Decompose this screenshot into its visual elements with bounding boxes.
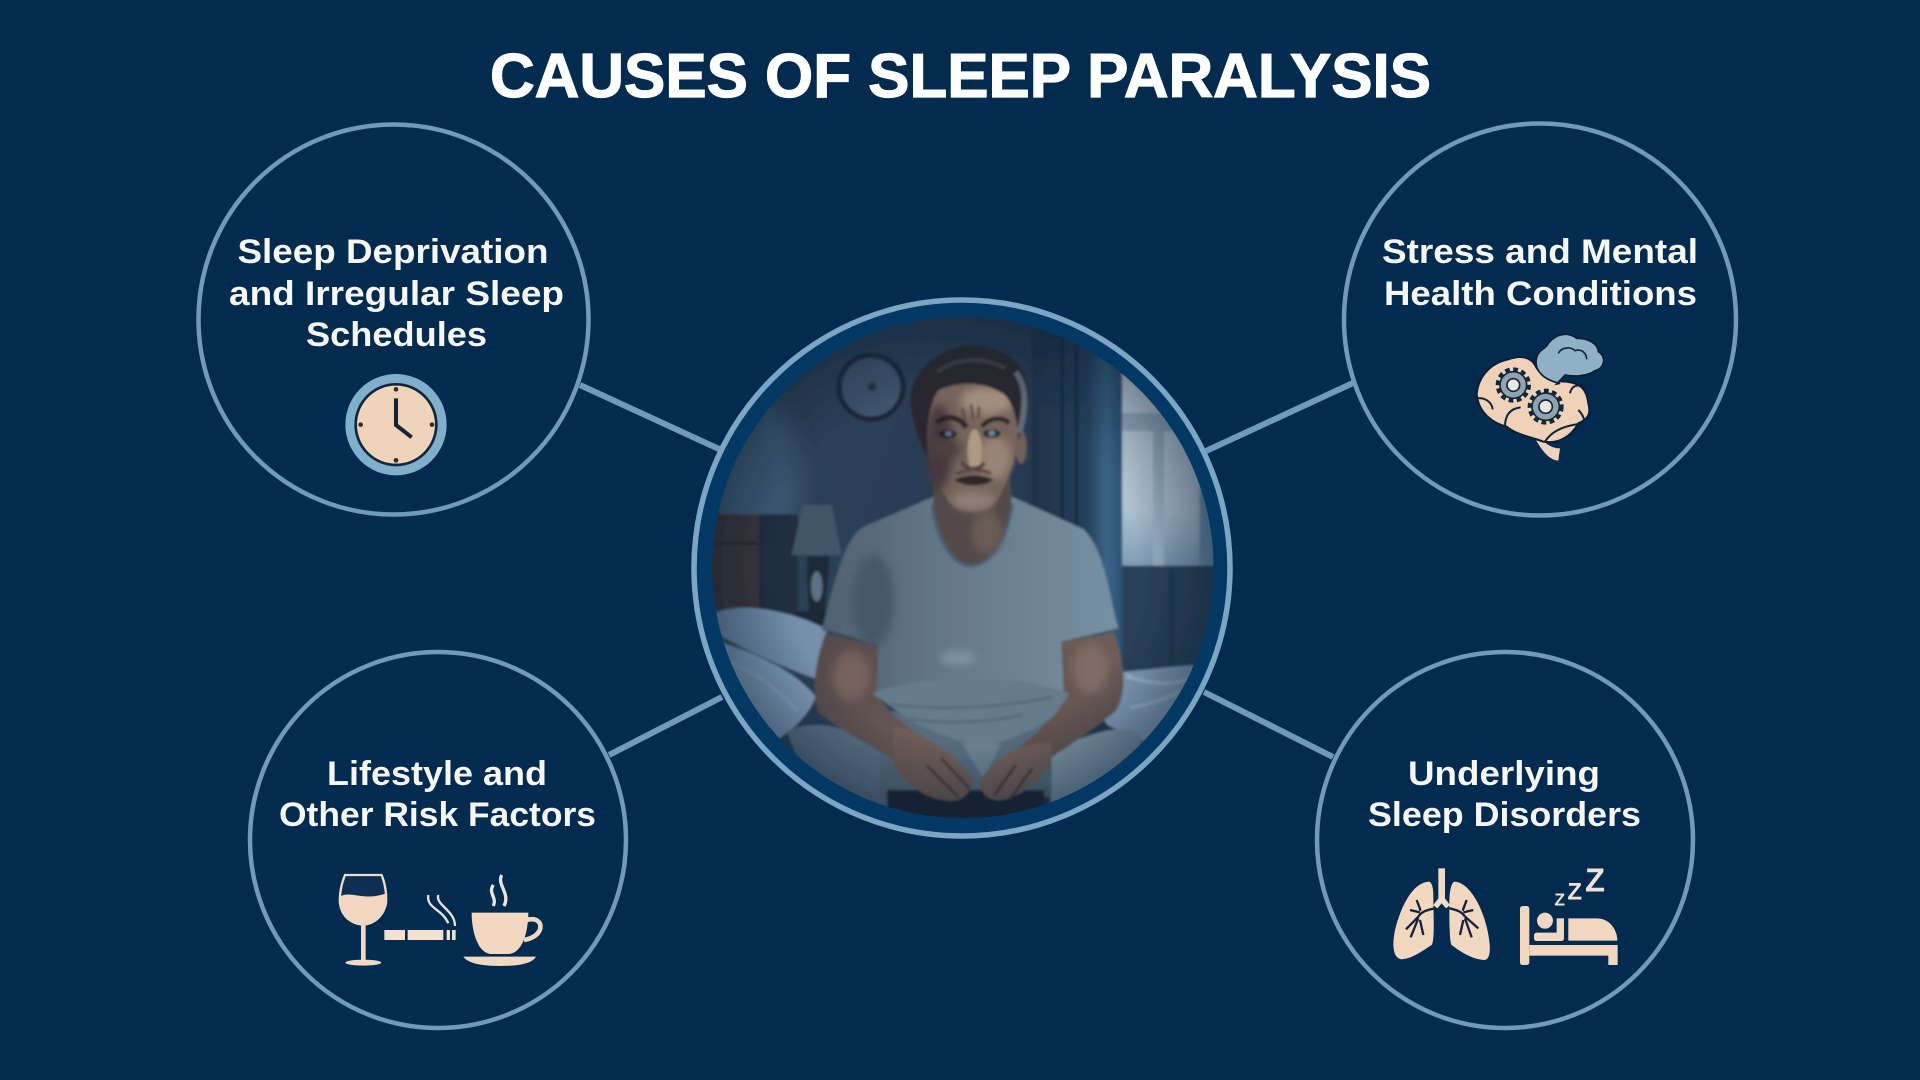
icon: person sleeping in bed [1520,862,1618,965]
head [925,377,1019,511]
bottom sheet [787,724,888,806]
eyes and brows [936,418,966,427]
heading: stress and mental health: Stress and Mental [1382,233,1698,271]
nose and mouth [962,461,984,468]
heading: sleep deprivation: Schedules [306,316,487,354]
blanket [872,683,1070,744]
wall clock [836,352,906,422]
icon: clock [345,374,447,475]
icon: lungs [1393,868,1490,960]
heading: underlying: Sleep Disorders [1368,796,1641,834]
heading: underlying [1368,755,1641,834]
panel: underlying sleep disorders [1317,652,1693,1028]
headboard [710,514,759,609]
panel: stress and mental health [1344,124,1736,516]
pillows [716,608,830,683]
heading: sleep deprivation: Sleep Deprivation [238,233,548,271]
heading: sleep deprivation [229,233,564,354]
heading: stress and mental health: Health Conditions [1384,275,1697,313]
heading: stress and mental health [1382,233,1698,313]
hair [910,345,1029,458]
icon: brain with gears and cloud [1476,334,1604,461]
icons: wine, cigarette, coffee [340,875,540,966]
ear [1015,431,1027,464]
heading: underlying: Underlying [1408,755,1600,793]
panel: sleep deprivation [198,124,588,514]
neck [933,479,1012,566]
panel: lifestyle and other risk factors [250,652,626,1028]
hands [893,726,974,801]
icon: person sleeping in bed: Z [1554,890,1565,910]
heading: lifestyle: Other Risk Factors [279,796,596,834]
icon: person sleeping in bed: Z [1585,862,1605,899]
heading: sleep deprivation: and Irregular Sleep [229,275,564,313]
heading: lifestyle: Lifestyle and [327,755,547,793]
curtain [1032,346,1124,661]
title: CAUSES OF SLEEP PARALYSIS [490,42,1431,111]
icon: person sleeping in bed: Z [1567,879,1582,906]
arms [814,632,914,759]
shirt [822,496,1119,694]
center photo panel: anxious man sitting in bed [694,300,1230,836]
window [1120,372,1202,568]
connector lines [580,383,1353,757]
right bedding [1103,664,1194,742]
lamp [791,505,841,555]
heading: lifestyle [279,755,596,834]
